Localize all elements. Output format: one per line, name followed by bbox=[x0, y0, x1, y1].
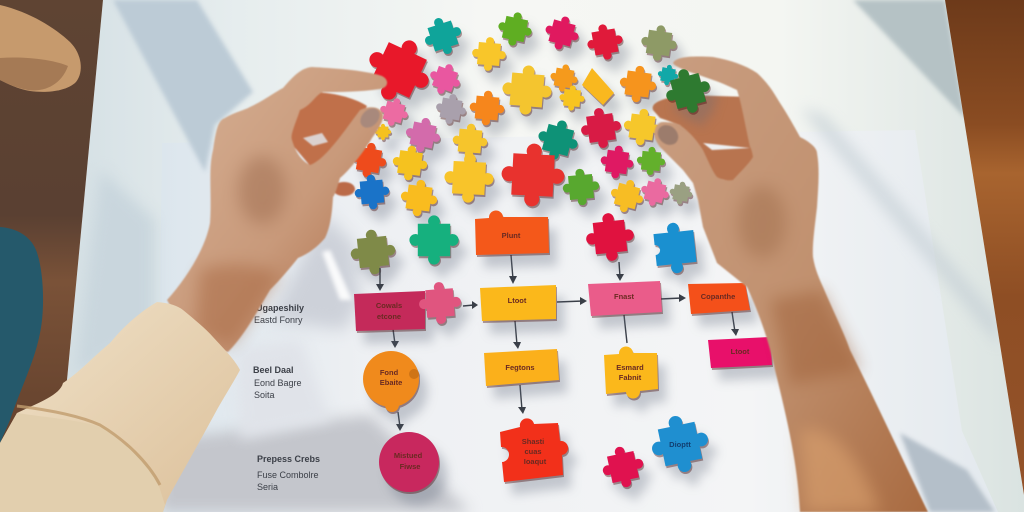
olive piece bbox=[639, 23, 679, 63]
orange piece bbox=[468, 89, 506, 127]
teal piece bbox=[419, 12, 467, 60]
left hand silhouette bbox=[167, 67, 387, 352]
red puzzle node bbox=[500, 418, 568, 482]
yellow piece bbox=[375, 124, 391, 140]
left hand curled fingers bbox=[290, 92, 367, 168]
large red piece bbox=[357, 28, 441, 112]
label group two bbox=[253, 365, 302, 400]
label group three: Seria bbox=[257, 482, 278, 492]
yellow puzzle node: Esmard bbox=[616, 363, 644, 372]
right hand silhouette bbox=[654, 57, 928, 512]
gap between right fingers bbox=[703, 143, 750, 150]
orange node bbox=[688, 283, 750, 314]
right palm shading bbox=[738, 186, 786, 258]
right hand curled fingers bbox=[653, 95, 758, 182]
yellow puzzle node bbox=[604, 346, 658, 399]
crimson circle node: Fiwse bbox=[400, 462, 420, 471]
yellow node: Ltoot bbox=[508, 296, 527, 305]
jeans bbox=[0, 227, 43, 443]
red puzzle node: Shasti bbox=[522, 437, 544, 446]
blue piece bbox=[353, 173, 391, 211]
olive puzzle node bbox=[348, 227, 398, 277]
shoe bbox=[0, 5, 81, 92]
orange circle node: Ebaite bbox=[380, 378, 402, 387]
orange node bbox=[475, 210, 549, 255]
yellow block bbox=[582, 68, 614, 105]
lower sleeve bbox=[0, 413, 165, 512]
left arm and hand bbox=[167, 67, 387, 352]
orange circle node: Fond bbox=[380, 368, 399, 377]
yellow piece bbox=[390, 143, 430, 183]
green piece bbox=[561, 167, 601, 207]
yellow puzzle node: Fabnit bbox=[619, 373, 642, 382]
orange node: Copanthe bbox=[701, 292, 735, 301]
orange red piece bbox=[349, 140, 389, 180]
pink piece bbox=[638, 175, 672, 209]
silver piece bbox=[434, 92, 468, 126]
scattered puzzle pieces bbox=[348, 9, 698, 277]
green piece bbox=[495, 9, 535, 49]
arrow magenta to yellow bbox=[463, 301, 478, 309]
sleeve bbox=[0, 302, 240, 512]
cuff fold bbox=[17, 406, 160, 485]
pink node bbox=[588, 281, 662, 316]
red piece bbox=[584, 21, 626, 63]
arrow orange to pink bbox=[731, 312, 739, 336]
arrow crimson to pink bbox=[616, 262, 624, 281]
green puzzle node bbox=[409, 215, 459, 265]
label group two: Eond Bagre bbox=[254, 378, 302, 388]
label group one: Eastd Fonry bbox=[254, 315, 303, 325]
arrow yellow to red bbox=[518, 385, 526, 414]
label group one: Ugapeshily bbox=[256, 303, 304, 313]
left palm shading bbox=[238, 156, 286, 224]
orange node: Plunt bbox=[502, 231, 521, 240]
crimson puzzle node bbox=[584, 211, 636, 263]
large red piece bbox=[500, 142, 566, 208]
yellow piece bbox=[398, 177, 440, 219]
blue puzzle node bbox=[652, 221, 698, 275]
pink node: Fnast bbox=[614, 292, 634, 301]
left thumbnail bbox=[357, 105, 383, 131]
magenta piece bbox=[598, 143, 636, 181]
yellow piece bbox=[471, 36, 507, 72]
magenta puzzle node bbox=[599, 443, 647, 491]
pink piece bbox=[425, 59, 465, 99]
arrow orange to yellow bbox=[509, 255, 517, 284]
left wrist shading bbox=[195, 265, 280, 345]
magenta node with piece: Cowals bbox=[376, 301, 402, 310]
yellow node bbox=[480, 285, 556, 321]
wooden floor left bbox=[0, 0, 103, 512]
hot pink node bbox=[708, 337, 772, 368]
arrow yellow to pink bbox=[557, 297, 587, 305]
yellow piece bbox=[621, 106, 663, 148]
flowchart nodes bbox=[354, 210, 772, 492]
magenta node with piece: etcone bbox=[377, 312, 401, 321]
large yellow piece bbox=[443, 152, 495, 204]
wooden floor right bbox=[945, 0, 1024, 495]
magenta node with piece bbox=[354, 281, 462, 331]
arrow pink to orange bbox=[660, 294, 686, 302]
right forearm highlight bbox=[800, 429, 880, 512]
arrow orange to crimson bbox=[396, 412, 404, 431]
left hand finger tip bbox=[333, 182, 355, 196]
blue puzzle node bbox=[646, 410, 714, 478]
sleeve body bbox=[0, 302, 240, 512]
hot pink node: Ltoot bbox=[731, 347, 750, 356]
arrow olive to magenta bbox=[376, 268, 384, 291]
olive piece bbox=[668, 180, 694, 206]
label group three: Prepess Crebs bbox=[257, 454, 320, 464]
orange piece bbox=[548, 62, 580, 94]
red puzzle node: cuas bbox=[524, 447, 542, 456]
label group one bbox=[254, 303, 304, 325]
yellow piece bbox=[558, 84, 586, 112]
yellow piece bbox=[451, 122, 489, 160]
red piece bbox=[578, 105, 624, 151]
right arm and hand bbox=[653, 57, 928, 512]
arrow magenta to orange bbox=[391, 329, 399, 348]
connector pink to yellow bbox=[624, 315, 627, 343]
right thumbnail bbox=[654, 121, 682, 149]
crimson circle node: Mistued bbox=[394, 451, 423, 460]
blue puzzle node: Dioptt bbox=[669, 440, 691, 449]
red puzzle node: Ioaqut bbox=[524, 457, 547, 466]
crimson circle node bbox=[379, 432, 439, 492]
label group three bbox=[257, 454, 320, 492]
teal piece bbox=[656, 63, 680, 87]
orange piece bbox=[617, 63, 659, 105]
pink piece bbox=[377, 95, 411, 129]
teal green piece bbox=[533, 115, 583, 165]
yellow node: Fegtons bbox=[505, 363, 535, 372]
held dark green piece bbox=[661, 64, 715, 118]
right forearm shadow bbox=[770, 290, 860, 385]
label group three: Fuse Combolre bbox=[257, 470, 319, 480]
label group two: Soita bbox=[254, 390, 275, 400]
gap between left fingers bbox=[303, 133, 328, 146]
pink piece bbox=[402, 114, 444, 156]
magenta piece bbox=[541, 12, 583, 54]
side labels bbox=[253, 303, 320, 492]
orange circle node bbox=[363, 351, 419, 412]
green piece bbox=[636, 146, 666, 176]
yellow node bbox=[484, 349, 559, 386]
label group two: Beel Daal bbox=[253, 365, 294, 375]
flowchart arrows bbox=[376, 255, 739, 431]
paper sheet bbox=[160, 130, 998, 512]
arrow yellow to yellow bbox=[513, 321, 521, 349]
yellow piece bbox=[607, 176, 647, 216]
yellow piece bbox=[500, 63, 554, 117]
